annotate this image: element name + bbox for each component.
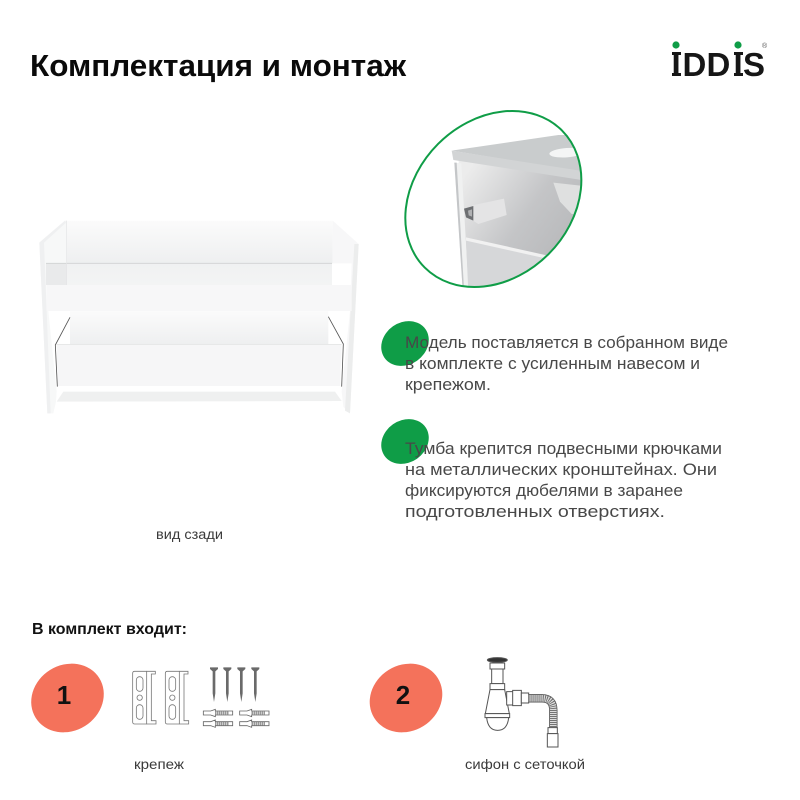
item 2 number badge: [357, 650, 455, 746]
logo: IDDIS: IDDIS: [672, 46, 765, 83]
front rail: [47, 285, 352, 311]
text block: delivery: крепежом.: [405, 376, 491, 394]
title: Комплектация и монтаж: [30, 49, 406, 83]
bottom rail: [57, 392, 342, 402]
text block: mounting: Тумба крепится подвесными крючками: [405, 440, 722, 458]
text block: delivery: Модель поставляется в собранном виде: [405, 334, 728, 352]
caption: rear view: вид сзади: [156, 527, 223, 542]
text block: mounting: на металлических кронштейнах. Они: [405, 461, 717, 479]
item 1 number badge: [18, 650, 117, 746]
item 1 number badge: 1: [57, 680, 71, 710]
cabinet rear view illustration: [39, 221, 359, 413]
icon: fasteners: [133, 667, 269, 727]
text block: delivery: [405, 334, 728, 394]
text block: delivery: в комплекте с усиленным навесом и: [405, 355, 700, 373]
cabinet interior: [458, 161, 580, 258]
lower back panel: [70, 311, 328, 344]
caption: siphon: сифон с сеточкой: [465, 757, 585, 772]
heading: kit contents: В комплект входит:: [32, 621, 187, 638]
text block: mounting: подготовленных отверстиях.: [405, 503, 665, 521]
basin: [554, 182, 580, 214]
detail: green oval with hanging bracket: [404, 110, 582, 288]
bullet blob 1: [372, 312, 438, 375]
countertop: [452, 135, 580, 170]
logo: IDDIS: ®: [762, 42, 768, 50]
caption: fasteners: крепеж: [134, 757, 184, 772]
bullet blob 2: [372, 410, 438, 473]
side strip: [456, 163, 468, 286]
bracket: [472, 199, 507, 224]
text block: mounting: [405, 440, 722, 521]
right side panel: [333, 221, 359, 413]
drawer front: [57, 344, 342, 386]
left side panel: [39, 221, 67, 413]
text block: mounting: фиксируются дюбелями в заранее: [405, 482, 683, 500]
drawer slides: [55, 317, 70, 387]
icon: siphon: [485, 658, 558, 747]
lower door: [467, 244, 543, 286]
back panel upper: [66, 221, 333, 263]
item 2 number badge: 2: [396, 680, 410, 710]
back panel lower band: [46, 263, 332, 285]
